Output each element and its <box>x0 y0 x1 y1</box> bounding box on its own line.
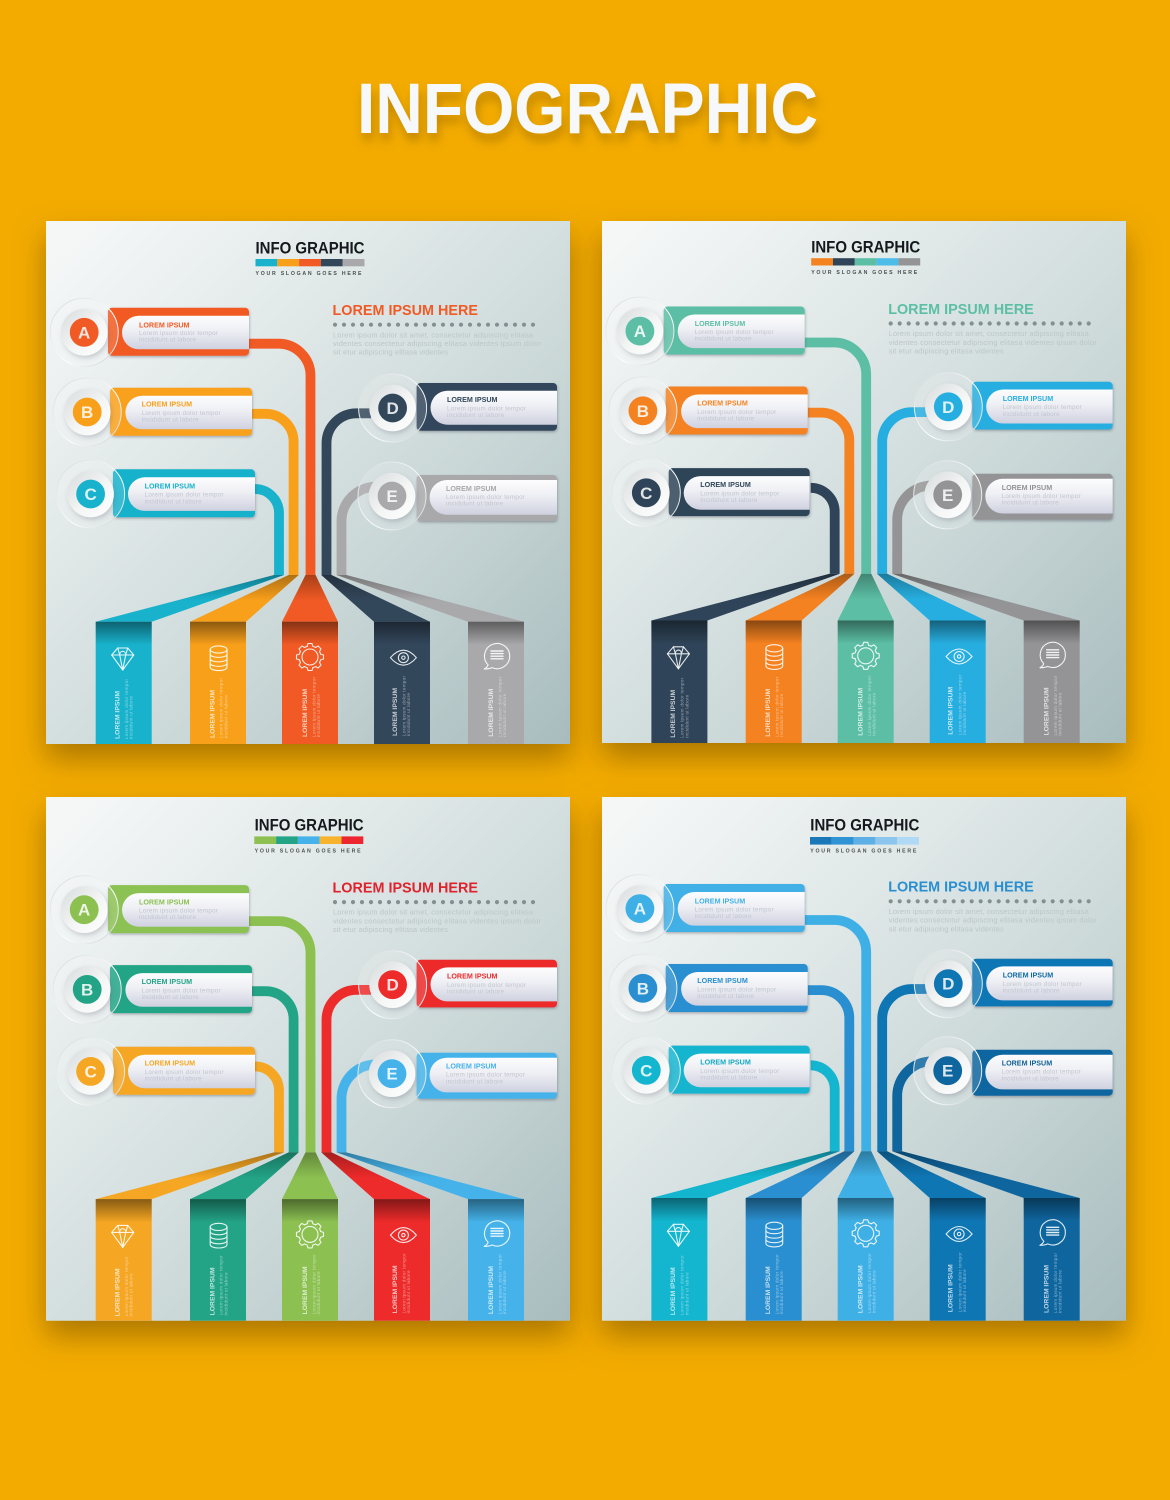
item B <box>53 378 252 446</box>
item A: A <box>78 901 90 920</box>
column: diamond: LOREM IPSUM <box>114 1268 122 1316</box>
item A <box>606 875 805 943</box>
item D: LOREM IPSUM <box>1003 971 1053 980</box>
panel: blue version <box>606 817 1113 1321</box>
column: gear: LOREM IPSUM <box>302 689 309 737</box>
column: database: Lorem ipsum dolor tempor <box>219 678 224 738</box>
column: gear: incididunt ut labore <box>872 692 877 736</box>
column: chat: incididunt ut labore <box>1058 692 1063 736</box>
item B: B <box>81 980 93 999</box>
item D: incididunt ut labore <box>1003 988 1060 995</box>
column: gear: LOREM IPSUM <box>858 1265 865 1313</box>
text block: sit etur adipiscing elitasa videntes <box>889 346 1004 356</box>
item A <box>50 876 249 944</box>
item C: incididunt ut labore <box>700 1075 758 1082</box>
brand heading: INFO GRAPHIC <box>811 239 920 257</box>
column: database <box>746 620 802 743</box>
column: chat: LOREM IPSUM <box>1044 687 1050 736</box>
connectors <box>805 342 932 574</box>
item E: incididunt ut labore <box>1002 500 1059 507</box>
text block: sit etur adipiscing elitasa videntes <box>333 348 448 357</box>
text block <box>332 879 542 934</box>
panel background 4 <box>602 797 1126 1321</box>
text block: LOREM IPSUM HERE <box>332 302 478 319</box>
column: gear <box>838 1198 894 1321</box>
column: chat: Lorem ipsum dolor tempor <box>497 676 502 737</box>
column: eye: Lorem ipsum dolor tempor <box>402 676 407 736</box>
item D: LOREM IPSUM <box>447 395 498 404</box>
connectors <box>805 920 932 1151</box>
item B: incididunt ut labore <box>697 416 755 422</box>
item D: Lorem ipsum dolor tempor <box>1003 981 1082 988</box>
column: eye: incididunt ut labore <box>962 691 967 735</box>
column: diamond: Lorem ipsum dolor tempor <box>680 677 685 738</box>
column: diamond: LOREM IPSUM <box>114 691 122 739</box>
item C: incididunt ut labore <box>145 1076 202 1083</box>
item B: incididunt ut labore <box>697 993 755 1000</box>
item A: A <box>634 900 646 919</box>
column: database: incididunt ut labore <box>223 695 228 738</box>
column: database <box>190 622 246 744</box>
brand heading: INFO GRAPHIC <box>810 817 920 835</box>
item A: LOREM IPSUM <box>695 897 745 906</box>
item C: C <box>84 485 97 504</box>
column: diamond: incididunt ut labore <box>684 1272 689 1315</box>
item C: incididunt ut labore <box>145 498 202 505</box>
item C: C <box>84 1062 97 1081</box>
item C: LOREM IPSUM <box>145 1059 195 1068</box>
item D: D <box>942 975 954 994</box>
text block: sit etur adipiscing elitasa videntes <box>889 924 1004 933</box>
item C: Lorem ipsum dolor tempor <box>700 1068 779 1075</box>
item A: incididunt ut labore <box>139 337 196 344</box>
item D: Lorem ipsum dolor tempor <box>1003 404 1082 411</box>
column: database: Lorem ipsum dolor tempor <box>774 676 779 737</box>
item A <box>606 297 805 365</box>
column: diamond: incididunt ut labore <box>129 696 134 739</box>
item D: Lorem ipsum dolor tempor <box>447 982 526 989</box>
text block: LOREM IPSUM HERE <box>888 301 1034 318</box>
item E <box>914 1037 1113 1105</box>
item C <box>57 1037 255 1105</box>
brand heading: INFO GRAPHIC <box>255 817 364 835</box>
text block <box>332 302 542 357</box>
brand heading: INFO GRAPHIC <box>256 239 365 257</box>
panel: green and red version <box>50 817 557 1321</box>
item B <box>53 955 252 1023</box>
column: diamond: incididunt ut labore <box>129 1273 134 1316</box>
column: gear: incididunt ut labore <box>316 694 321 737</box>
item E: LOREM IPSUM <box>1002 1059 1052 1068</box>
item D: D <box>942 398 954 417</box>
item E <box>914 461 1113 529</box>
column: eye: Lorem ipsum dolor tempor <box>957 1252 962 1312</box>
item E: E <box>942 1062 953 1081</box>
item E: incididunt ut labore <box>446 501 503 508</box>
column: eye <box>930 620 986 743</box>
item D <box>914 950 1113 1018</box>
text block: sit etur adipiscing elitasa videntes <box>333 925 448 934</box>
ribbons fanning out <box>651 1151 1080 1198</box>
column: eye <box>374 1199 430 1321</box>
column: chat: incididunt ut labore <box>1058 1270 1063 1313</box>
panel background 2 <box>602 221 1126 743</box>
column: chat <box>468 1199 524 1321</box>
column: eye: LOREM IPSUM <box>948 686 955 735</box>
item D: Lorem ipsum dolor tempor <box>447 405 526 412</box>
column: diamond <box>96 622 152 744</box>
column: chat: LOREM IPSUM <box>1044 1265 1050 1313</box>
item E: incididunt ut labore <box>446 1078 503 1085</box>
brand heading <box>810 817 920 854</box>
item B: Lorem ipsum dolor tempor <box>697 986 776 993</box>
panel: teal version <box>606 239 1113 743</box>
item C <box>57 460 255 528</box>
column: eye: LOREM IPSUM <box>392 688 399 736</box>
item B: Lorem ipsum dolor tempor <box>142 987 221 994</box>
column: gear: LOREM IPSUM <box>302 1266 309 1314</box>
brand heading: YOUR SLOGAN GOES HERE <box>811 270 918 276</box>
item C: C <box>640 484 652 503</box>
item D: LOREM IPSUM <box>1003 394 1053 403</box>
brand heading <box>811 239 920 276</box>
column: database: incididunt ut labore <box>779 1271 784 1314</box>
column: diamond <box>96 1199 152 1321</box>
column: chat: LOREM IPSUM <box>488 1266 495 1314</box>
item C <box>612 459 810 527</box>
item A: LOREM IPSUM <box>139 898 190 907</box>
column: database <box>190 1199 246 1321</box>
item E: E <box>942 486 953 505</box>
column: database: LOREM IPSUM <box>765 1266 772 1314</box>
item B <box>609 954 808 1022</box>
column: eye: incididunt ut labore <box>962 1269 967 1312</box>
item B <box>609 377 808 445</box>
column: chat: incididunt ut labore <box>502 693 507 737</box>
brand heading <box>254 817 364 854</box>
column: diamond: LOREM IPSUM <box>670 1267 677 1315</box>
item C: Lorem ipsum dolor tempor <box>145 492 224 499</box>
ribbons fanning out <box>96 1152 524 1199</box>
column: database <box>746 1198 802 1321</box>
item B: B <box>637 979 649 998</box>
text block: LOREM IPSUM HERE <box>332 879 478 896</box>
text block: videntes consectetur adipiscing elitasa videntes ipsum dolor <box>889 338 1097 347</box>
column: eye: Lorem ipsum dolor tempor <box>957 674 962 735</box>
column: diamond: Lorem ipsum dolor tempor <box>680 1255 685 1315</box>
panel background 3 <box>46 797 570 1321</box>
item E: Lorem ipsum dolor tempor <box>1002 1069 1081 1076</box>
item E <box>358 462 557 530</box>
column: chat: incididunt ut labore <box>502 1271 507 1314</box>
column: chat: Lorem ipsum dolor tempor <box>1053 1253 1058 1313</box>
item B: LOREM IPSUM <box>697 398 748 408</box>
brand heading: YOUR SLOGAN GOES HERE <box>810 848 917 854</box>
text block: videntes consectetur adipiscing elitasa videntes ipsum dolor <box>333 339 542 348</box>
column: database: incididunt ut labore <box>223 1272 228 1315</box>
column: gear: incididunt ut labore <box>872 1270 877 1313</box>
item A <box>50 298 249 366</box>
column: diamond: Lorem ipsum dolor tempor <box>124 1256 129 1316</box>
column: diamond <box>651 1198 707 1321</box>
item E: incididunt ut labore <box>1002 1075 1059 1082</box>
column: gear: Lorem ipsum dolor tempor <box>312 1254 316 1314</box>
column: chat: LOREM IPSUM <box>488 688 495 737</box>
item A: incididunt ut labore <box>695 336 752 342</box>
item C: Lorem ipsum dolor tempor <box>700 491 779 498</box>
item C <box>612 1036 810 1104</box>
text block: Lorem ipsum dolor sit amet, consectetur adipiscing elitasa <box>333 330 534 339</box>
item A: incididunt ut labore <box>139 914 196 921</box>
item A: LOREM IPSUM <box>139 320 190 329</box>
item B: incididunt ut labore <box>142 994 199 1001</box>
column: chat: Lorem ipsum dolor tempor <box>1053 675 1058 736</box>
column: eye: Lorem ipsum dolor tempor <box>402 1253 407 1313</box>
item D <box>914 373 1113 441</box>
column: eye: LOREM IPSUM <box>392 1265 399 1313</box>
item A: incididunt ut labore <box>695 913 752 920</box>
item E: Lorem ipsum dolor tempor <box>446 1072 525 1079</box>
column: chat <box>1024 620 1080 743</box>
ribbons fanning out <box>651 574 1080 620</box>
column: database: LOREM IPSUM <box>209 690 216 738</box>
panel background 1 <box>46 221 570 744</box>
item A: Lorem ipsum dolor tempor <box>695 329 774 336</box>
column: gear <box>282 1199 338 1321</box>
item D: LOREM IPSUM <box>447 972 498 981</box>
column: diamond: LOREM IPSUM <box>670 689 677 738</box>
item A: Lorem ipsum dolor tempor <box>139 330 218 337</box>
text block: Lorem ipsum dolor sit amet, consectetur adipiscing elitasa <box>333 908 534 917</box>
item E: Lorem ipsum dolor tempor <box>1002 493 1081 500</box>
column: database: incididunt ut labore <box>779 693 784 737</box>
text block <box>888 879 1097 933</box>
item D: D <box>386 399 399 418</box>
item C: LOREM IPSUM <box>700 1058 751 1067</box>
column: gear: LOREM IPSUM <box>858 687 865 736</box>
title: INFOGRAPHIC <box>357 70 818 149</box>
item C: LOREM IPSUM <box>145 481 195 490</box>
text block: videntes consectetur adipiscing elitasa videntes ipsum dolor <box>333 916 542 925</box>
column: chat <box>1024 1198 1080 1321</box>
column: diamond: incididunt ut labore <box>684 694 689 738</box>
column: diamond <box>651 620 707 743</box>
item A: A <box>634 322 646 341</box>
item B: B <box>81 403 93 422</box>
item B: LOREM IPSUM <box>142 977 192 986</box>
panel: orange red version <box>50 239 557 744</box>
column: gear <box>282 622 338 744</box>
text block: Lorem ipsum dolor sit amet, consectetur adipiscing elitasa <box>889 329 1090 338</box>
column: database: LOREM IPSUM <box>209 1267 216 1315</box>
text block: videntes consectetur adipiscing elitasa videntes ipsum dolor <box>889 916 1097 925</box>
item A: Lorem ipsum dolor tempor <box>695 906 774 913</box>
column: eye <box>930 1198 986 1321</box>
item E: LOREM IPSUM <box>446 1062 496 1071</box>
text block: Lorem ipsum dolor sit amet, consectetur adipiscing elitasa <box>889 907 1090 916</box>
text block <box>888 301 1097 356</box>
column: chat <box>468 622 524 744</box>
item A: A <box>78 323 90 342</box>
connectors <box>249 344 376 575</box>
item C: incididunt ut labore <box>700 497 758 504</box>
column: database: LOREM IPSUM <box>765 688 772 737</box>
brand heading <box>256 239 365 277</box>
column: gear: Lorem ipsum dolor tempor <box>867 1253 872 1313</box>
column: gear <box>838 620 894 743</box>
item D: D <box>386 976 399 995</box>
column: gear: incididunt ut labore <box>316 1271 321 1314</box>
item E <box>358 1040 557 1108</box>
item B: Lorem ipsum dolor tempor <box>697 409 776 416</box>
item D: incididunt ut labore <box>447 412 504 419</box>
text block: LOREM IPSUM HERE <box>888 879 1034 896</box>
item B: incididunt ut labore <box>142 417 199 424</box>
column: eye: LOREM IPSUM <box>948 1264 955 1312</box>
column: diamond: Lorem ipsum dolor tempor <box>124 679 129 739</box>
item E: E <box>386 487 398 506</box>
column: gear: Lorem ipsum dolor tempor <box>867 675 872 736</box>
column: eye <box>374 622 430 744</box>
item E: Lorem ipsum dolor tempor <box>446 494 525 501</box>
ribbons fanning out <box>96 575 524 622</box>
item C: Lorem ipsum dolor tempor <box>145 1069 224 1076</box>
item E: LOREM IPSUM <box>1002 483 1052 492</box>
column: database: Lorem ipsum dolor tempor <box>219 1255 224 1315</box>
item A: Lorem ipsum dolor tempor <box>139 907 218 914</box>
brand heading: YOUR SLOGAN GOES HERE <box>256 271 362 277</box>
item E: E <box>386 1065 398 1084</box>
item C: LOREM IPSUM <box>700 480 751 489</box>
item B: Lorem ipsum dolor tempor <box>142 410 221 417</box>
item C: C <box>640 1061 652 1080</box>
item B: LOREM IPSUM <box>697 976 748 985</box>
column: database: Lorem ipsum dolor tempor <box>774 1254 779 1314</box>
connectors <box>249 921 376 1152</box>
item D <box>359 951 557 1019</box>
item B: B <box>637 402 649 421</box>
item B: LOREM IPSUM <box>142 400 192 409</box>
item D: incididunt ut labore <box>447 989 504 996</box>
item D <box>359 374 557 442</box>
item E: LOREM IPSUM <box>446 484 496 493</box>
column: gear: Lorem ipsum dolor tempor <box>312 677 316 737</box>
item D: incididunt ut labore <box>1003 411 1060 418</box>
item A: LOREM IPSUM <box>695 319 745 328</box>
column: eye: incididunt ut labore <box>406 693 411 736</box>
column: eye: incididunt ut labore <box>406 1270 411 1313</box>
brand heading: YOUR SLOGAN GOES HERE <box>255 848 361 854</box>
column: chat: Lorem ipsum dolor tempor <box>497 1254 502 1314</box>
